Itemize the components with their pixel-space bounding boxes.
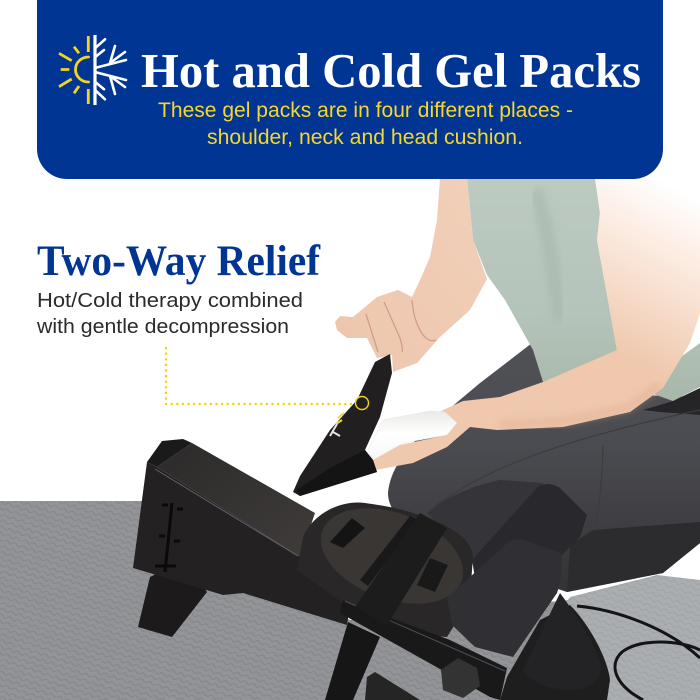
- height adjust slot: [155, 503, 183, 572]
- subtitle: shoulder, neck and head cushion.: [207, 126, 523, 149]
- back cushion: [472, 484, 587, 578]
- upper arm and pinching hand: [335, 178, 487, 372]
- description text: Hot/Cold therapy combined: [37, 290, 303, 312]
- tray: [500, 605, 610, 700]
- subtitle: These gel packs are in four different places -: [158, 99, 573, 122]
- upper edge highlight: [155, 469, 298, 556]
- strap under layer: [360, 516, 418, 586]
- callout dotted line: [166, 347, 354, 404]
- lower leg shadow: [567, 522, 700, 592]
- heading: Two-Way Relief: Two-Way Relief: [37, 238, 321, 285]
- bottom pipe: [365, 672, 420, 700]
- shirt: [467, 178, 700, 401]
- brushed top plate: [157, 443, 315, 557]
- person: [335, 178, 700, 592]
- platform recess: [308, 490, 476, 622]
- description text: [36, 290, 303, 338]
- front cushion: [447, 539, 562, 657]
- cushions: [447, 484, 601, 690]
- rear leg: [138, 560, 207, 637]
- tray cushion: [523, 593, 601, 690]
- forearm underside shading: [500, 385, 660, 425]
- exercise mat: [0, 501, 700, 700]
- round platform: [297, 502, 473, 637]
- icon: sun and snowflake: [59, 35, 126, 105]
- description text: with gentle decompression: [36, 316, 289, 338]
- front thigh shadow: [427, 480, 543, 560]
- title: Hot and Cold Gel Packs: [141, 43, 641, 98]
- black gel pack cover: [293, 354, 392, 496]
- subtitle: [158, 99, 573, 149]
- velcro patches: [330, 518, 365, 548]
- pants: [388, 343, 700, 592]
- cables: [577, 606, 700, 700]
- knob: [441, 658, 480, 698]
- small logo on cover: [336, 413, 344, 424]
- base rail: [340, 600, 507, 700]
- callout marker: [356, 396, 368, 410]
- strap: [355, 513, 447, 625]
- knee seam: [430, 410, 700, 530]
- device side wall: [133, 462, 350, 625]
- lower strap: [325, 622, 380, 700]
- dark waistband shadow: [643, 388, 700, 415]
- white gel insert: [368, 411, 457, 460]
- lower arm and open hand: [373, 178, 700, 470]
- shirt fold shading: [535, 190, 560, 320]
- header panel: [37, 0, 663, 179]
- decompression device: [133, 439, 610, 700]
- finger lines: [366, 300, 436, 352]
- end cap: [147, 439, 192, 467]
